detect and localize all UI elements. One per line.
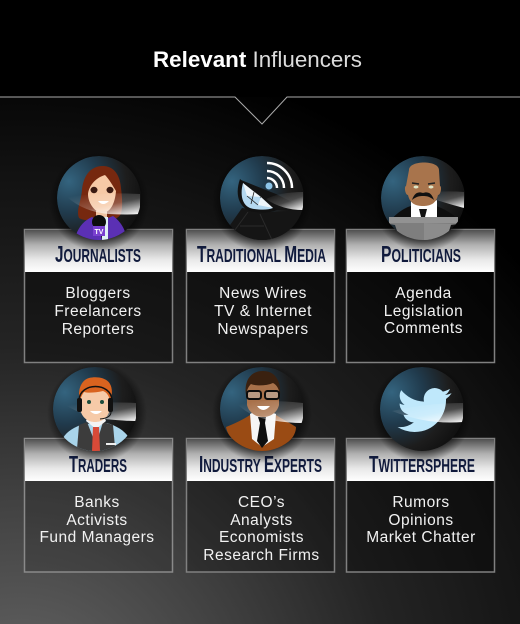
list: Comments [384,320,463,337]
list: Analysts [230,512,293,529]
list: Activists [66,512,128,529]
icon shadow [212,363,312,463]
panel body [186,230,334,362]
panel body [24,230,172,362]
heading: TRADITIONAL MEDIA [197,241,326,267]
icon shadow [47,363,147,463]
list: Legislation [384,303,463,320]
panel header [25,439,172,481]
list: Market Chatter [366,529,476,546]
list: Banks [74,494,120,511]
heading: JOURNALISTS [55,241,141,267]
card: politicians [346,152,494,362]
icon: trader with headset [53,367,137,452]
icon: journalist [57,156,141,240]
list: Agenda [395,285,452,302]
list: Freelancers [54,303,142,320]
heading: TRADERS [69,451,127,477]
icon shadow [212,152,312,252]
panel body [24,438,172,572]
list: Rumors [392,494,450,511]
list: News Wires [219,285,307,302]
list: Newspapers [217,321,309,338]
list: Bloggers [65,285,131,302]
card: journalists [24,152,172,362]
icon shadow [373,152,473,252]
list: CEO’s [238,494,285,511]
icon: satellite dish [220,156,304,240]
card: industry experts [186,363,334,572]
list: TV & Internet [214,303,312,320]
heading: INDUSTRY EXPERTS [199,451,322,477]
panel body [346,438,494,572]
icon: journalist: TV [95,229,104,236]
heading: POLITICIANS [381,241,461,267]
card: traders [24,363,172,572]
panel header [347,439,494,481]
heading: TWITTERSPHERE [369,451,475,477]
panel header [25,230,172,272]
panel body [186,438,334,572]
icon: industry expert [220,367,304,452]
list: Economists [219,529,304,546]
panel body [346,230,494,362]
title divider with pointer [0,97,520,124]
icon: politician at podium [381,156,465,240]
list: Reporters [62,321,134,338]
list: Fund Managers [39,529,155,546]
list: Opinions [388,512,454,529]
card: traditional media [186,152,334,362]
card: twittersphere [346,363,494,572]
panel header [347,230,494,272]
icon: twitter bird [380,367,464,451]
list: Research Firms [203,547,320,564]
panel header [187,230,334,272]
icon shadow [49,152,149,252]
top band [0,0,520,97]
icon shadow [372,363,472,463]
title: Relevant Influencers [153,47,362,72]
panel header [187,439,334,481]
